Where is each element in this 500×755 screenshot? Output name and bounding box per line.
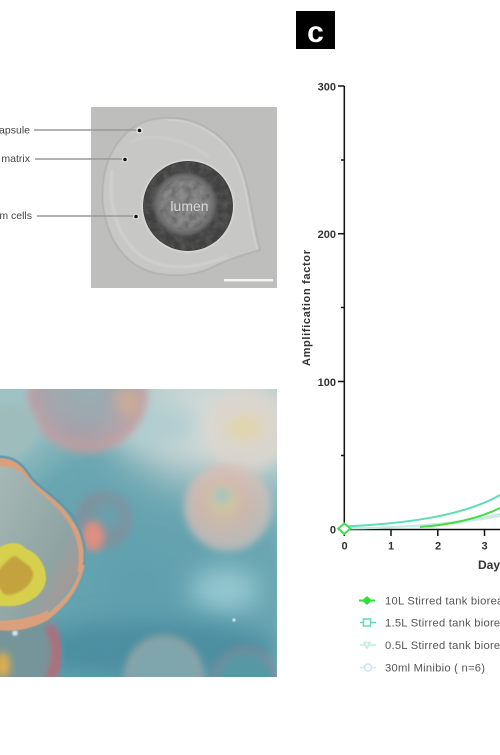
x tick labels: 3 bbox=[481, 540, 488, 552]
lumen label: lumen bbox=[170, 198, 209, 214]
y axis bbox=[338, 86, 344, 530]
y tick labels: 0 bbox=[330, 524, 336, 536]
x tick labels: 2 bbox=[435, 540, 441, 552]
label: matrix bbox=[1, 153, 128, 165]
bubble: bottom centre bbox=[120, 631, 208, 677]
panel label: c: c bbox=[307, 16, 324, 49]
x tick labels: 1 bbox=[388, 540, 394, 552]
origin marker bbox=[338, 524, 350, 534]
label: capsule bbox=[0, 124, 143, 136]
bubble: right bbox=[184, 463, 272, 551]
scale bar bbox=[224, 279, 273, 282]
legend bbox=[359, 596, 500, 674]
label: matrix: matrix bbox=[1, 153, 31, 165]
bubble: top left bbox=[0, 409, 36, 454]
series: 10L stirred tank bbox=[420, 508, 500, 527]
line chart: amplification factor bbox=[301, 82, 500, 572]
x axis bbox=[344, 530, 500, 536]
series: 1.5L stirred tank bbox=[344, 495, 500, 526]
yellow inner organoid bbox=[0, 543, 46, 606]
bubble: top centre bbox=[24, 389, 150, 458]
speck bbox=[232, 618, 236, 622]
illustration background bbox=[0, 389, 277, 677]
panel label: c bbox=[296, 11, 335, 49]
bubble: bottom right bbox=[210, 644, 277, 677]
label: stem cells bbox=[0, 210, 139, 222]
y tick labels: 300 bbox=[318, 82, 336, 94]
x tick labels bbox=[341, 540, 488, 552]
y tick labels: 100 bbox=[318, 377, 336, 389]
panel: illustration of encapsulated organoids bbox=[0, 389, 277, 677]
bubble: bottom left bbox=[0, 622, 63, 677]
organoid sphere bbox=[142, 160, 234, 252]
bubble: top right bbox=[212, 389, 277, 474]
capsule outline bbox=[103, 118, 273, 281]
panel: capsule micrograph bbox=[0, 107, 277, 288]
x tick labels: 0 bbox=[341, 540, 348, 552]
y tick labels bbox=[318, 82, 336, 536]
legend item: 30ml: 30ml Minibio ( n=6) bbox=[385, 662, 485, 674]
y axis title: Amplification factor bbox=[301, 249, 313, 366]
main cell with yellow organoid bbox=[0, 457, 86, 631]
series: 0.5L stirred tank bbox=[344, 514, 500, 528]
micrograph background bbox=[91, 107, 277, 288]
series: 30ml Minibio bbox=[344, 516, 500, 528]
bubble: centre small bbox=[74, 491, 132, 549]
y tick labels: 200 bbox=[318, 229, 336, 241]
